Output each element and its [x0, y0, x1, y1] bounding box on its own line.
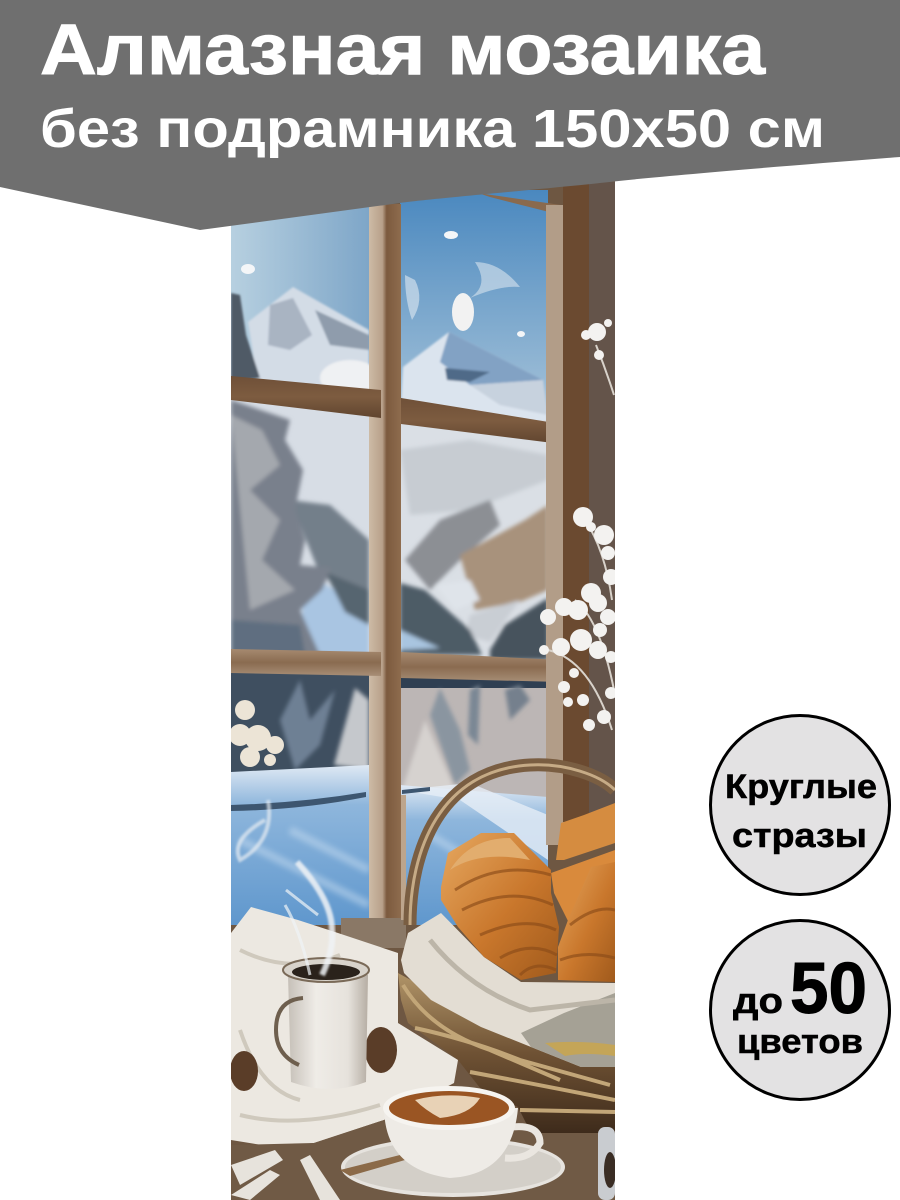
- badge: round rhinestones: [710, 716, 890, 894]
- upper right pane: sky and mountain: [400, 190, 548, 425]
- knitted cloth in basket: [401, 913, 615, 1067]
- upper left pane: sky and mountain: [231, 207, 369, 389]
- badge: up to 50 colours: до: [733, 980, 783, 1021]
- backdrop: [231, 150, 615, 1200]
- mug with steam: [238, 800, 369, 1089]
- badge: round rhinestones: Круглые: [725, 768, 877, 806]
- white branches: [539, 319, 619, 731]
- window frame: [231, 182, 615, 948]
- title line 2: без подрамника 150х50 см: [40, 99, 825, 159]
- header banner: [0, 0, 900, 230]
- middle left pane: clouds, slopes and snowy pine: [231, 400, 369, 655]
- badge: up to 50 colours: [710, 920, 890, 1100]
- badge: up to 50 colours: 50: [790, 949, 867, 1029]
- blanket: [231, 907, 458, 1147]
- poster image: winter window with breakfast: [229, 150, 619, 1200]
- badge: up to 50 colours: цветов: [737, 1023, 863, 1061]
- latte cup: [340, 1086, 565, 1197]
- lower panes: forest: [229, 672, 548, 801]
- title line 1: Алмазная мозаика: [40, 11, 766, 90]
- table with fringe: [231, 1120, 385, 1200]
- pine cones: [230, 1027, 397, 1091]
- snow ground: [231, 765, 548, 925]
- croissants: [441, 803, 615, 982]
- badge: round rhinestones: стразы: [732, 817, 867, 855]
- middle right pane: snowy mountain and rock: [400, 420, 548, 660]
- basket: [398, 765, 615, 1133]
- white flower on table: [598, 1127, 616, 1200]
